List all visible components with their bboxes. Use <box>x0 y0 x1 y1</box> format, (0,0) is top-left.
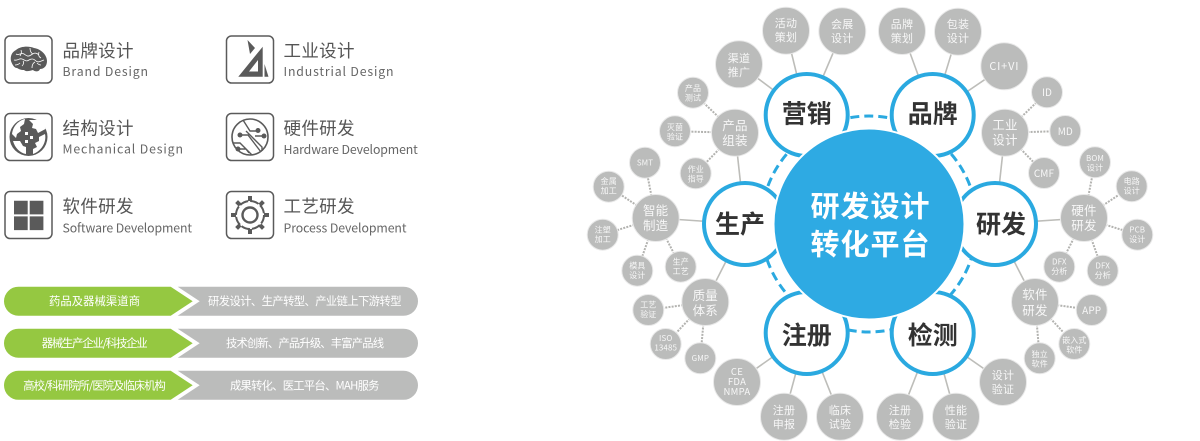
node: 嵌入式软件: 嵌入式 <box>1062 335 1086 346</box>
panel: platform hub diagram <box>587 7 1153 440</box>
node: 性能验证 <box>932 393 980 440</box>
legend item: mechanical design: Mechanical Design <box>62 140 183 158</box>
node: 智能制造: 智能 <box>643 200 669 219</box>
node: 设计验证 <box>980 358 1026 406</box>
node: 电路设计 <box>1116 171 1147 202</box>
node: 设计验证: 设计 <box>992 367 1014 383</box>
legend item: hardware development: 硬件研发 <box>284 116 354 141</box>
central circle: platform title: 转化平台 <box>810 222 930 264</box>
node: PCB设计: 设计 <box>1129 234 1145 245</box>
hub: 生产 <box>704 183 786 265</box>
banner: device makers: 器械生产企业/科技企业 <box>42 335 148 351</box>
banner: institutions <box>4 371 418 400</box>
node: 临床试验: 试验 <box>829 416 851 432</box>
node: 注册检验: 检验 <box>889 416 911 432</box>
node: 智能制造: 制造 <box>643 215 669 234</box>
node: 工艺验证 <box>633 294 664 326</box>
node: PCB设计 <box>1122 219 1153 250</box>
node: CI+VI: CI+VI <box>989 58 1019 74</box>
node: ISO 13485: 13485 <box>654 342 677 354</box>
node: 注塑加工: 加工 <box>595 234 611 245</box>
central circle: platform title <box>774 128 964 320</box>
node: ISO 13485 <box>650 328 681 360</box>
node: 活动策划: 活动 <box>775 15 797 31</box>
node: 工业设计 <box>982 109 1028 156</box>
node: 活动策划: 策划 <box>775 29 797 45</box>
node: 产品测试: 测试 <box>685 92 701 104</box>
legend item: industrial design <box>226 36 394 83</box>
node: 模具设计 <box>622 255 653 286</box>
node: SMT <box>630 147 660 178</box>
node: 会展设计: 会展 <box>831 16 854 32</box>
node: 生产工艺: 工艺 <box>673 266 689 277</box>
node: 金属加工: 加工 <box>601 186 617 196</box>
connectors: primary solid lines <box>656 31 1084 417</box>
legend item: mechanical design <box>5 114 183 160</box>
node: 模具设计: 设计 <box>629 270 645 281</box>
node: 渠道推广: 渠道 <box>728 50 750 66</box>
hub: 注册 <box>766 292 848 374</box>
banner: distributors: 研发设计、生产转型、产业链上下游转型 <box>208 293 402 309</box>
node: 品牌策划: 策划 <box>891 30 913 46</box>
node: 临床试验: 临床 <box>829 402 851 418</box>
node: DFX分析 left: DFX <box>1052 256 1067 268</box>
node: 独立软件 <box>1024 343 1055 374</box>
legend item: brand design: 品牌设计 <box>62 38 134 63</box>
node: 产品组装 <box>712 109 758 156</box>
banner: institutions: 成果转化、医工平台、MAH服务 <box>230 377 379 393</box>
node: 软件研发 <box>1012 278 1058 326</box>
node: 灭菌验证 <box>660 116 690 147</box>
node: 工业设计: 工业 <box>992 114 1018 134</box>
legend item: hardware development: Hardware Development <box>284 140 418 158</box>
node: 质量体系 <box>682 278 729 326</box>
legend item: hardware development <box>226 114 418 160</box>
node: ID <box>1032 77 1062 108</box>
node: 会展设计: 设计 <box>831 30 854 46</box>
node: 作业指导: 作业 <box>688 164 704 175</box>
legend item: brand design: Brand Design <box>62 62 148 80</box>
hub: 研发 <box>954 183 1036 265</box>
node: 独立软件: 独立 <box>1032 349 1048 360</box>
node: DFX分析 left <box>1044 251 1075 282</box>
hub: 研发: 研发 <box>976 205 1026 241</box>
node: CE FDA NMPA: NMPA <box>723 384 751 398</box>
node: 硬件研发: 硬件 <box>1071 200 1097 219</box>
banner: distributors: 药品及器械渠道商 <box>49 293 140 309</box>
node: 软件研发: 研发 <box>1022 300 1048 319</box>
node: 工业设计: 设计 <box>992 130 1018 148</box>
node: 产品组装: 产品 <box>722 115 748 134</box>
node: 品牌策划 <box>878 8 926 54</box>
connectors: secondary dotted lines <box>603 92 1137 358</box>
node: 渠道推广: 推广 <box>728 64 750 80</box>
banner: distributors <box>4 287 418 316</box>
node: 金属加工 <box>593 171 624 202</box>
node: 电路设计: 电路 <box>1124 176 1140 187</box>
node: 产品测试 <box>678 77 708 108</box>
node: 软件研发: 软件 <box>1022 284 1048 303</box>
node: 包装设计 <box>934 8 982 55</box>
node: 生产工艺 <box>665 251 696 282</box>
node: GMP: GMP <box>692 353 709 364</box>
node: DFX分析 right <box>1087 255 1118 286</box>
node: APP: APP <box>1082 302 1101 317</box>
legend item: industrial design: 工业设计 <box>284 38 354 63</box>
node: DFX分析 right: 分析 <box>1095 270 1111 281</box>
node: 注册申报: 申报 <box>773 416 795 432</box>
node: MD <box>1050 116 1081 146</box>
hub: 品牌: 品牌 <box>908 94 958 130</box>
node: CMF <box>1028 158 1060 188</box>
node: DFX分析 left: 分析 <box>1051 266 1067 277</box>
legend item: software development: Software Development <box>62 218 192 236</box>
node: 质量体系: 体系 <box>693 300 718 319</box>
node: 注册申报 <box>760 393 808 440</box>
node: 金属加工: 金属 <box>601 176 617 187</box>
panel: audience banners <box>4 287 418 400</box>
hub: 检测 <box>892 292 974 374</box>
node: 灭菌验证: 验证 <box>667 132 683 142</box>
node: APP <box>1076 294 1107 326</box>
node: BOM设计: 设计 <box>1087 162 1103 174</box>
node: 临床试验 <box>816 393 864 440</box>
node: CE FDA NMPA <box>714 358 760 406</box>
node: 电路设计: 设计 <box>1124 186 1140 196</box>
node: PCB设计: PCB <box>1129 224 1145 236</box>
node: SMT: SMT <box>637 158 653 168</box>
node: 产品测试: 产品 <box>685 83 701 94</box>
node: 会展设计 <box>819 8 866 55</box>
node: 性能验证: 性能 <box>945 402 967 418</box>
hub: 生产: 生产 <box>715 205 765 241</box>
legend item: process development: 工艺研发 <box>284 194 354 219</box>
legend item: mechanical design: 结构设计 <box>62 116 134 141</box>
node: ID: ID <box>1042 84 1052 99</box>
legend item: software development: 软件研发 <box>62 194 134 219</box>
node: 智能制造 <box>632 194 679 242</box>
node: 独立软件: 软件 <box>1032 358 1048 370</box>
node: 品牌策划: 品牌 <box>891 16 913 32</box>
node: 灭菌验证: 灭菌 <box>667 122 683 133</box>
node: CE FDA NMPA: CE <box>731 364 743 378</box>
node: 硬件研发: 研发 <box>1071 215 1097 234</box>
node: CMF: CMF <box>1034 165 1055 180</box>
node: 注册检验 <box>876 393 924 440</box>
node: 包装设计: 包装 <box>947 16 969 32</box>
legend item: industrial design: Industrial Design <box>284 62 394 80</box>
central circle: platform title: 研发设计 <box>810 184 930 226</box>
legend item: process development: Process Development <box>284 218 407 236</box>
legend item: process development <box>226 192 407 238</box>
dashed orbit ring <box>761 116 977 332</box>
node: MD: MD <box>1058 123 1073 138</box>
node: 工艺验证: 工艺 <box>640 300 656 310</box>
node: CI+VI <box>981 43 1028 90</box>
node: 硬件研发 <box>1060 194 1108 242</box>
node: DFX分析 right: DFX <box>1095 260 1110 272</box>
node: 性能验证: 验证 <box>945 416 967 432</box>
hub: 营销: 营销 <box>782 94 832 130</box>
node: BOM设计 <box>1080 147 1110 178</box>
node: 活动策划 <box>762 7 810 54</box>
node: 作业指导 <box>680 158 711 189</box>
node: 注塑加工 <box>587 219 618 250</box>
hub: 检测: 检测 <box>908 316 958 352</box>
node: 嵌入式软件 <box>1059 328 1090 360</box>
node: 嵌入式软件: 软件 <box>1066 344 1082 356</box>
banner: device makers <box>4 329 418 358</box>
node: GMP <box>685 343 716 374</box>
node: ISO 13485: ISO <box>659 333 672 344</box>
hub: 营销 <box>766 74 848 156</box>
node: 注册检验: 注册 <box>889 402 911 418</box>
banner: institutions: 高校/科研院所/医院及临床机构 <box>23 377 166 393</box>
legend item: brand design <box>5 36 148 83</box>
node: 产品组装: 组装 <box>722 130 748 149</box>
node: CE FDA NMPA: FDA <box>728 374 746 388</box>
node: 模具设计: 模具 <box>629 260 645 272</box>
node: 设计验证: 验证 <box>992 381 1014 397</box>
node: 包装设计: 设计 <box>947 30 969 46</box>
node: 作业指导: 指导 <box>688 174 704 184</box>
node: 质量体系: 质量 <box>693 285 718 304</box>
node: 注册申报: 注册 <box>773 402 795 418</box>
hub: 注册: 注册 <box>782 316 832 352</box>
panel: capability legend <box>5 36 418 238</box>
node: 渠道推广 <box>716 41 762 88</box>
node: 工艺验证: 验证 <box>640 309 656 320</box>
node: 注塑加工: 注塑 <box>595 224 611 236</box>
legend item: software development <box>5 192 192 238</box>
node: 生产工艺: 生产 <box>673 256 689 268</box>
banner: device makers: 技术创新、产品升级、丰富产品线 <box>226 335 384 351</box>
hub: 品牌 <box>892 74 974 156</box>
node: BOM设计: BOM <box>1086 153 1104 164</box>
